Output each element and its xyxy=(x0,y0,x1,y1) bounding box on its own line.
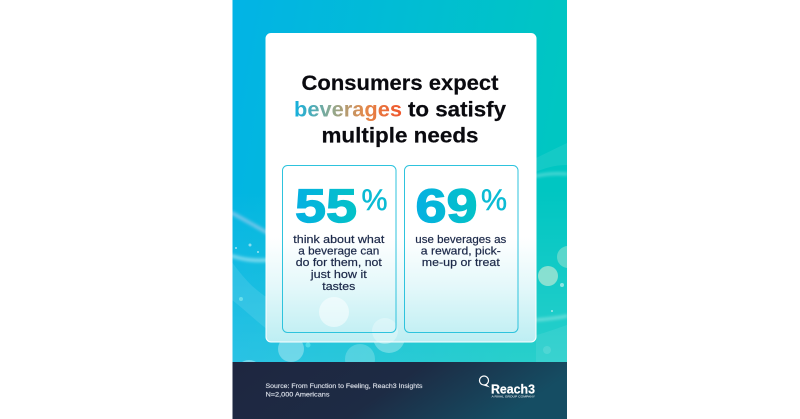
source text xyxy=(266,383,423,398)
white card xyxy=(266,34,536,344)
stat description: just how it xyxy=(310,269,367,281)
stat number 69: 69 xyxy=(416,179,478,232)
logo: Reach3 xyxy=(480,376,535,398)
title: Consumers expect xyxy=(302,71,498,95)
background panel xyxy=(232,0,579,386)
highlighted word: beverages: beverages xyxy=(294,98,402,122)
percent sign: % xyxy=(362,184,388,217)
stat description xyxy=(415,234,507,269)
title xyxy=(294,71,506,148)
stat description xyxy=(293,234,384,293)
stat number 55: 55 xyxy=(295,179,357,232)
stat description: tastes xyxy=(322,281,356,293)
title: multiple needs xyxy=(322,124,479,148)
stat description: a reward, pick- xyxy=(421,245,501,257)
logo: Reach3: A RIVAL GROUP COMPANY xyxy=(492,394,535,398)
stat card: 55% xyxy=(282,166,396,332)
percent sign: % xyxy=(481,184,507,217)
source text: N=2,000 Americans xyxy=(266,392,330,398)
stat description: use beverages as xyxy=(415,234,507,246)
title: to satisfy xyxy=(408,98,506,122)
footer band xyxy=(232,362,567,419)
source text: Source: From Function to Feeling, Reach3 Insights xyxy=(266,383,423,390)
stat description: a beverage can xyxy=(298,245,379,257)
logo: Reach3: Reach3 xyxy=(491,382,535,396)
stat description: me-up or treat xyxy=(422,257,500,269)
stat description: think about what xyxy=(293,234,384,246)
stat card: 69% xyxy=(404,166,518,332)
stat description: do for them, not xyxy=(296,257,382,269)
